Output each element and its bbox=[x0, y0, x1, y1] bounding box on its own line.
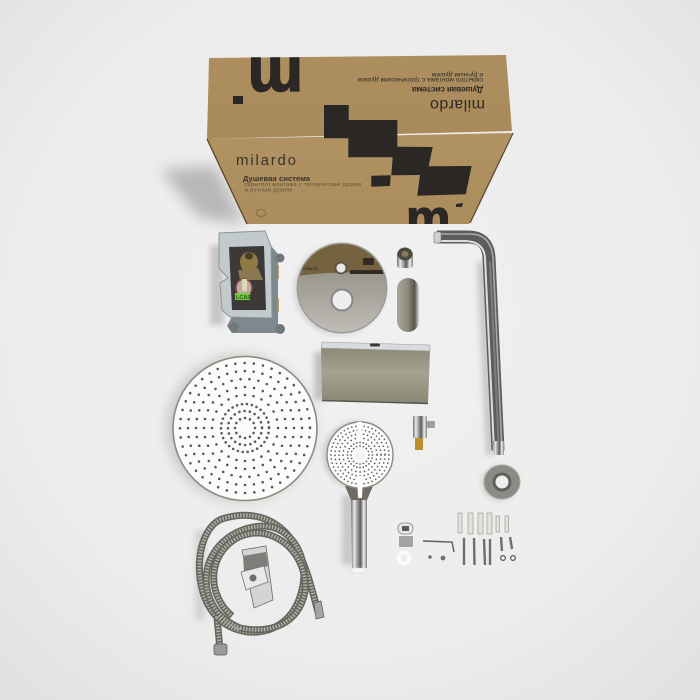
hand shower bbox=[327, 422, 393, 573]
milardo text on front bbox=[236, 152, 361, 194]
pipe end caps bbox=[434, 232, 441, 243]
hose holder bracket bbox=[241, 546, 273, 608]
spray face bbox=[327, 422, 393, 488]
handle tip bbox=[352, 568, 366, 573]
large hole bbox=[332, 290, 352, 310]
tiny screws bbox=[428, 555, 445, 560]
black pixel-step graphic bbox=[324, 105, 472, 196]
milardo text on front: скрытого монтажа с тропическим душем bbox=[245, 182, 361, 188]
hose bbox=[199, 515, 324, 655]
milardo text on front: Душевая система bbox=[243, 174, 311, 183]
milardo text on flap, upside down: milardo bbox=[430, 96, 485, 113]
screws bbox=[464, 537, 512, 565]
rectangular wall cover bbox=[321, 342, 430, 404]
milardo text on front: milardo bbox=[236, 152, 296, 169]
milardo text on flap, upside down bbox=[358, 71, 485, 113]
white washer bbox=[398, 552, 410, 564]
selector slots bbox=[357, 422, 363, 498]
logo m on flap: m bbox=[248, 44, 303, 113]
rain shower head bbox=[173, 356, 317, 500]
cardboard box bbox=[206, 55, 514, 224]
mounting frame bbox=[227, 240, 285, 333]
green label: LCAS bbox=[236, 295, 251, 301]
milardo text on flap, upside down: Душевая система bbox=[412, 85, 483, 95]
chrome knob bbox=[397, 248, 413, 268]
logo m on front bbox=[408, 203, 463, 224]
rubber rings bbox=[501, 556, 515, 560]
round trim plate: milardo bbox=[303, 266, 319, 271]
handle yoke bbox=[345, 486, 373, 500]
dark interior bbox=[229, 246, 266, 310]
clear cover bbox=[219, 231, 272, 318]
round trim plate bbox=[296, 242, 388, 334]
brass cartridge bbox=[236, 252, 263, 297]
shower arm pipe bbox=[434, 232, 504, 455]
box front panel bbox=[207, 133, 512, 224]
small fittings bbox=[398, 513, 515, 565]
lever handle bbox=[397, 278, 419, 332]
wall plugs bbox=[458, 513, 508, 534]
box side edges bbox=[207, 133, 513, 224]
milardo text on flap, upside down: и ручным душем bbox=[432, 71, 483, 78]
brass screws bbox=[277, 265, 279, 312]
milardo text on front: и ручным душем bbox=[245, 188, 292, 194]
chrome clip bbox=[398, 523, 413, 547]
box top flap bbox=[207, 55, 512, 139]
allen key bbox=[423, 541, 454, 552]
small hole bbox=[336, 262, 346, 274]
elbow connector bbox=[413, 416, 435, 450]
logo m on front: m bbox=[406, 190, 450, 246]
handle bbox=[351, 498, 367, 568]
milardo text on flap, upside down: скрытого монтажа с тропическим душем bbox=[358, 76, 483, 83]
soft shadows bbox=[160, 165, 516, 620]
hose ferrules bbox=[314, 601, 324, 619]
recycling mark bbox=[256, 210, 266, 216]
wall flange bbox=[484, 465, 520, 499]
box reflection on plate bbox=[297, 244, 387, 276]
mounting ears bbox=[229, 254, 285, 334]
concealed valve box bbox=[219, 231, 285, 334]
